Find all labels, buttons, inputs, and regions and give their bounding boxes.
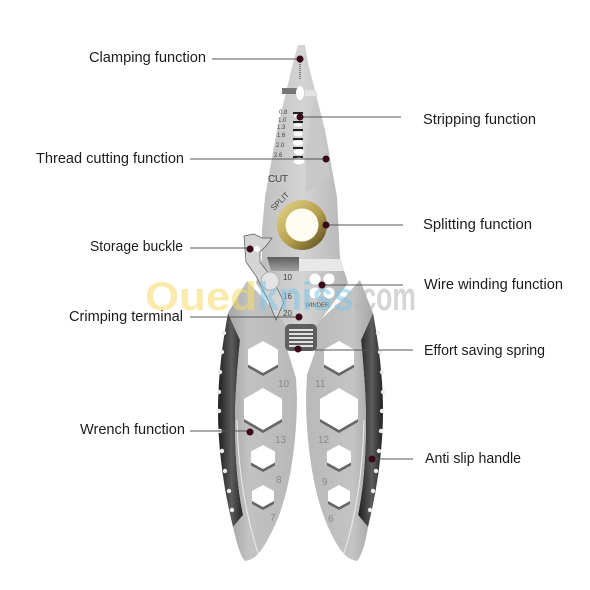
callout: storage buckle: Storage buckle xyxy=(90,238,183,255)
left handle rubber grip xyxy=(218,313,243,527)
size numbers: 0.8 xyxy=(279,110,288,116)
watermark: kniss xyxy=(258,275,354,319)
watermark xyxy=(145,275,416,319)
CUT text: CUT xyxy=(268,174,288,185)
dark jaw slot xyxy=(267,257,299,271)
upper jaw blade xyxy=(256,45,348,325)
callout: thread cutting function xyxy=(36,150,330,167)
crimp numbers: 16 xyxy=(283,292,292,301)
stripping holes xyxy=(293,113,304,164)
SPLIT text: SPLIT xyxy=(269,190,291,212)
size numbers: 1.3 xyxy=(277,125,286,131)
callout: stripping function xyxy=(296,111,536,128)
callout: storage buckle xyxy=(90,238,254,255)
callout: wire winding function: Wire winding function xyxy=(424,276,563,293)
left handle plate xyxy=(228,281,297,561)
callout: stripping function: Stripping function xyxy=(423,111,536,128)
callout: clamping function: Clamping function xyxy=(89,49,206,66)
size numbers: 1.6 xyxy=(277,133,286,139)
winding holes xyxy=(310,274,334,298)
crimp numbers: WINDER xyxy=(305,303,330,309)
crimp numbers: 20 xyxy=(283,309,292,318)
callout: wire winding function xyxy=(318,276,563,293)
crimp numbers xyxy=(283,273,330,318)
callout: wrench function: Wrench function xyxy=(80,421,185,438)
blade light strips xyxy=(306,108,330,192)
wrench size numbers: 10 xyxy=(278,379,290,390)
wrench size numbers: 12 xyxy=(318,435,330,446)
wrench size numbers: 8 xyxy=(276,475,282,486)
spring xyxy=(285,324,317,351)
callout: anti slip handle xyxy=(368,450,521,467)
size numbers: 1.0 xyxy=(278,118,287,124)
callout: clamping function xyxy=(89,49,304,66)
right handle rubber grip xyxy=(358,313,383,527)
size numbers xyxy=(274,110,288,159)
crimp numbers: 10 xyxy=(283,273,292,282)
callout: anti slip handle: Anti slip handle xyxy=(425,450,521,467)
wrench size numbers: 9 xyxy=(322,477,328,488)
callout: effort saving spring xyxy=(294,342,545,359)
right hexagon holes xyxy=(320,341,358,510)
callout: splitting function: Splitting function xyxy=(423,216,532,233)
light jaw slot xyxy=(299,259,344,271)
wrench size numbers: 11 xyxy=(315,379,326,390)
handle edge highlights xyxy=(237,420,258,553)
wrench size numbers: 13 xyxy=(275,435,287,446)
left hexagon holes xyxy=(244,341,282,510)
right handle plate xyxy=(306,280,373,561)
pivot disc xyxy=(261,272,279,290)
watermark: Oued xyxy=(145,275,257,319)
wrench size numbers: 7 xyxy=(270,513,276,524)
callout: splitting function xyxy=(322,216,532,233)
storage buckle xyxy=(244,234,284,320)
gold ring xyxy=(277,200,327,250)
callout: crimping terminal: Crimping terminal xyxy=(69,308,183,325)
size numbers: 2.6 xyxy=(274,153,283,159)
grip studs xyxy=(217,331,385,512)
wrench size numbers xyxy=(270,379,334,525)
size numbers: 2.0 xyxy=(276,143,285,149)
callout: wrench function xyxy=(80,421,254,438)
watermark: .com xyxy=(354,275,416,319)
callout: effort saving spring: Effort saving spring xyxy=(424,342,545,359)
clamp serrations and slot xyxy=(299,62,301,80)
wrench size numbers: 6 xyxy=(328,514,334,525)
callout: crimping terminal xyxy=(69,308,302,325)
callout: thread cutting function: Thread cutting function xyxy=(36,150,184,167)
plier illustration xyxy=(217,45,385,561)
